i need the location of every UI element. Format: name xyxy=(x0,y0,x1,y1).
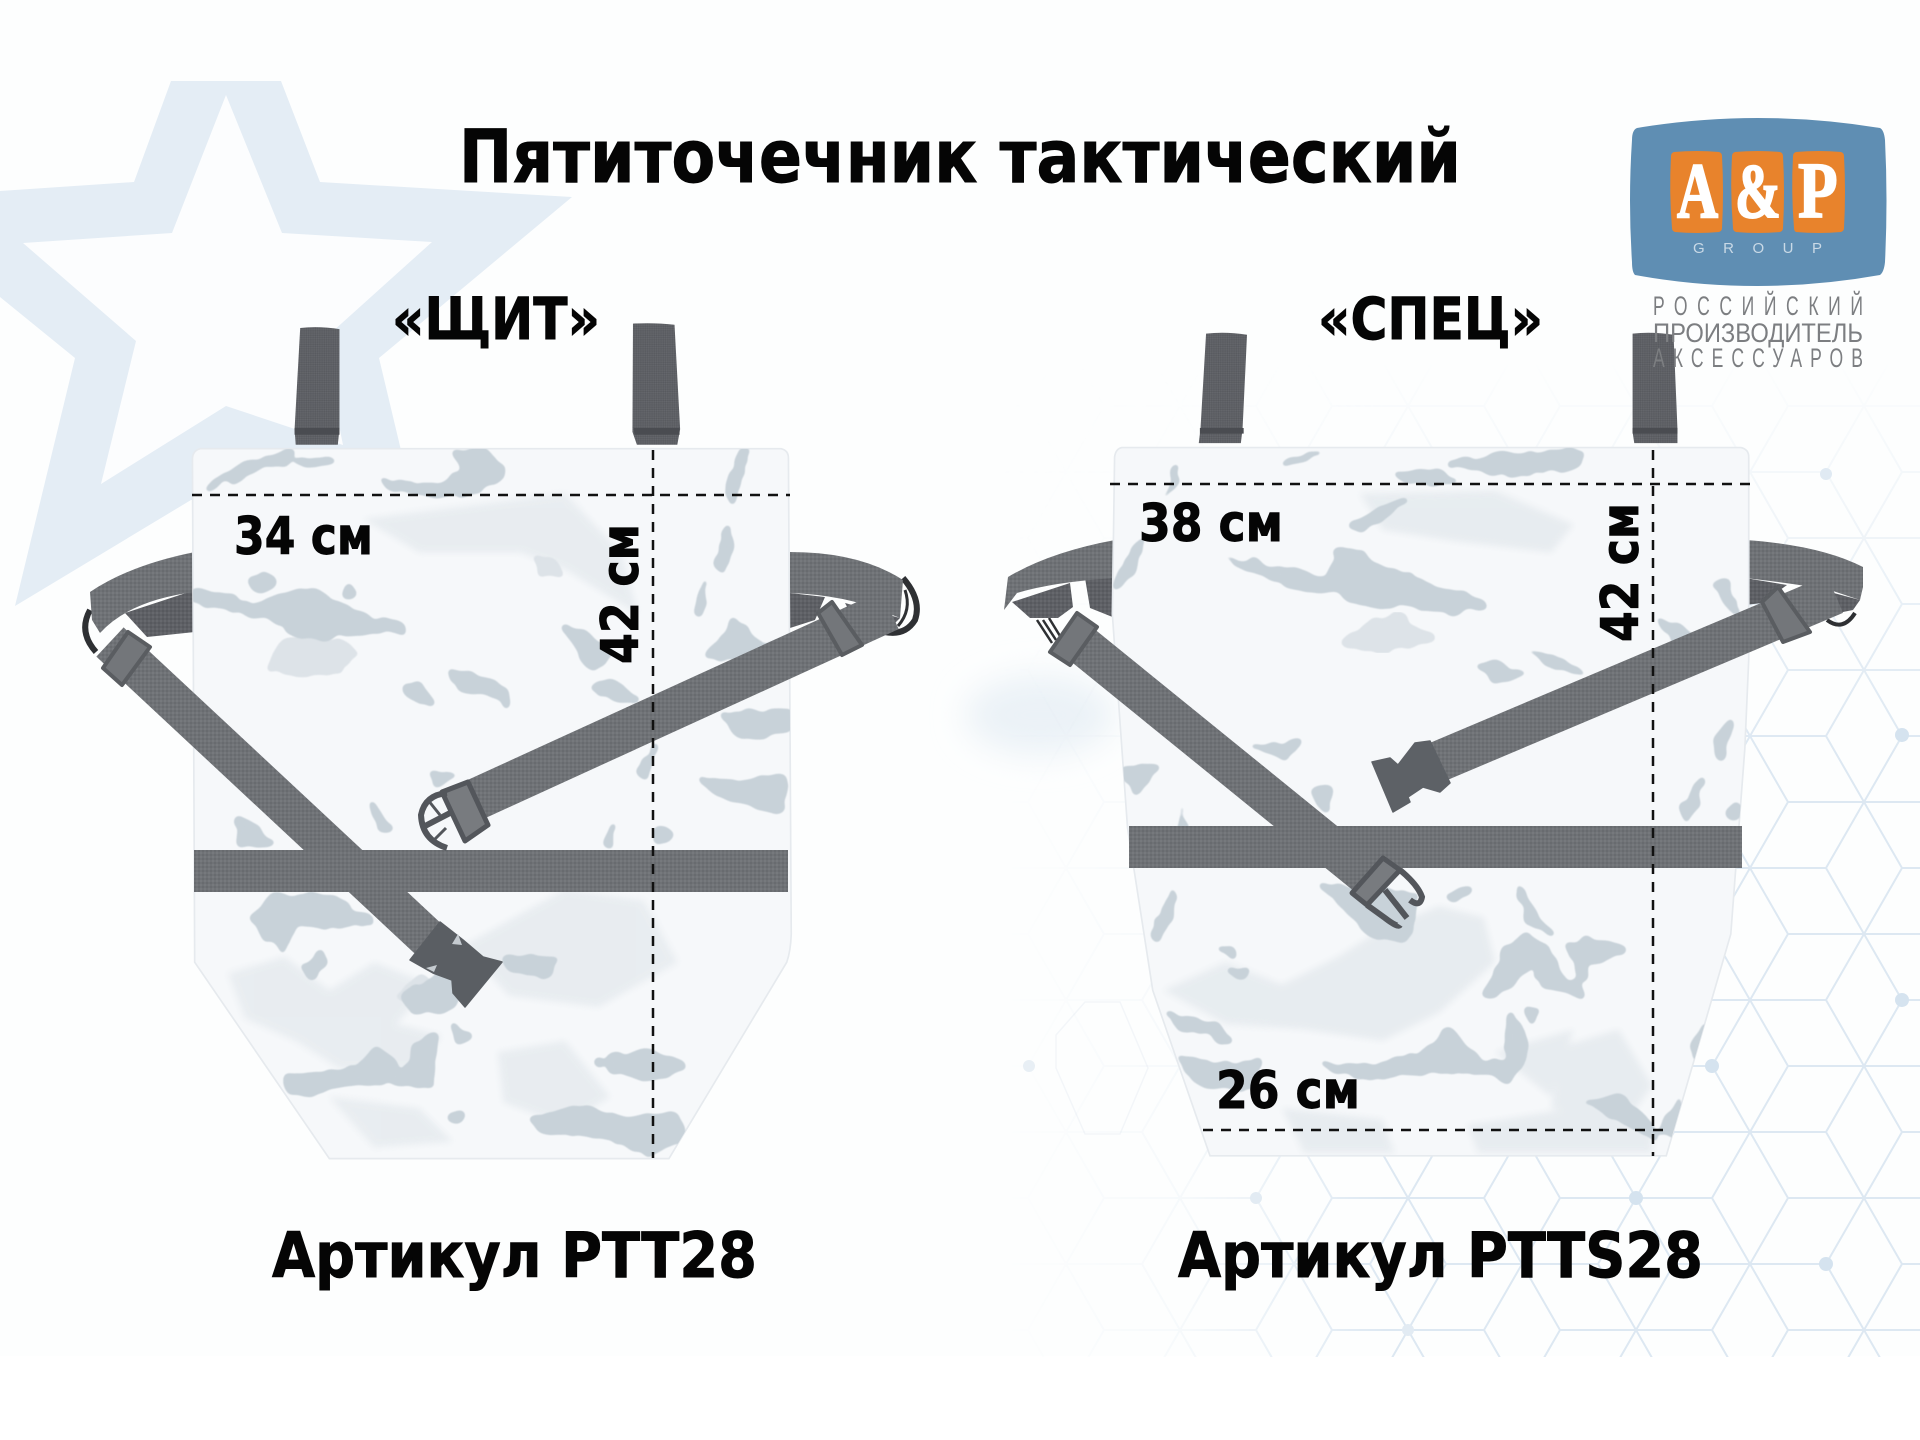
top loops xyxy=(295,323,680,445)
logo: A&P Group xyxy=(1630,118,1886,286)
right diagonal strap with buckle xyxy=(1372,587,1835,812)
variant label: ЩИТ: «ЩИТ» xyxy=(392,285,600,353)
waist band xyxy=(1129,826,1742,868)
article: PTT28: Артикул PTT28 xyxy=(272,1219,757,1292)
product: СПЕЦ pouch xyxy=(1004,333,1863,1156)
hexagon network pattern xyxy=(1023,464,1920,1357)
logo tagline xyxy=(1653,290,1863,373)
logo: A&P Group: P xyxy=(1798,146,1838,235)
camouflage print xyxy=(195,450,790,1153)
dimension: 38 см: 38 см xyxy=(1139,494,1283,554)
product: ЩИТ pouch xyxy=(85,323,917,1159)
dimension: 34 см: 34 см xyxy=(234,507,373,567)
pouch body xyxy=(192,449,791,1159)
dimension: 42 см (ЩИТ): 42 см xyxy=(591,524,651,664)
camouflage print xyxy=(1113,450,1742,1153)
waist band xyxy=(194,850,788,892)
left diagonal strap with buckle xyxy=(103,632,502,1007)
logo tagline: ПРОИЗВОДИТЕЛЬ xyxy=(1653,318,1863,348)
article: PTTS28: Артикул PTTS28 xyxy=(1178,1219,1703,1292)
side straps behind body xyxy=(85,552,917,652)
logo tagline: АКСЕССУАРОВ xyxy=(1653,342,1863,373)
logo: A&P Group: & xyxy=(1735,149,1781,234)
dimension lines: ЩИТ xyxy=(192,450,790,1158)
dimension lines: СПЕЦ xyxy=(1110,450,1750,1156)
top loops xyxy=(1199,333,1677,443)
right diagonal strap with buckle xyxy=(421,602,890,848)
left diagonal strap with buckle xyxy=(1050,613,1422,926)
logo: A&P Group: GROUP xyxy=(1693,240,1822,257)
logo tagline: РОССИЙСКИЙ xyxy=(1653,290,1863,321)
logo: A&P Group: A xyxy=(1677,147,1718,234)
dimension: 42 см (СПЕЦ): 42 см xyxy=(1591,503,1651,642)
variant label: СПЕЦ: «СПЕЦ» xyxy=(1318,285,1543,353)
star watermark xyxy=(0,81,572,606)
dimension: 26 см: 26 см xyxy=(1216,1061,1360,1121)
title: Пятиточечник тактический xyxy=(459,115,1461,200)
side straps behind body xyxy=(1004,540,1863,643)
pouch body xyxy=(1112,448,1749,1156)
